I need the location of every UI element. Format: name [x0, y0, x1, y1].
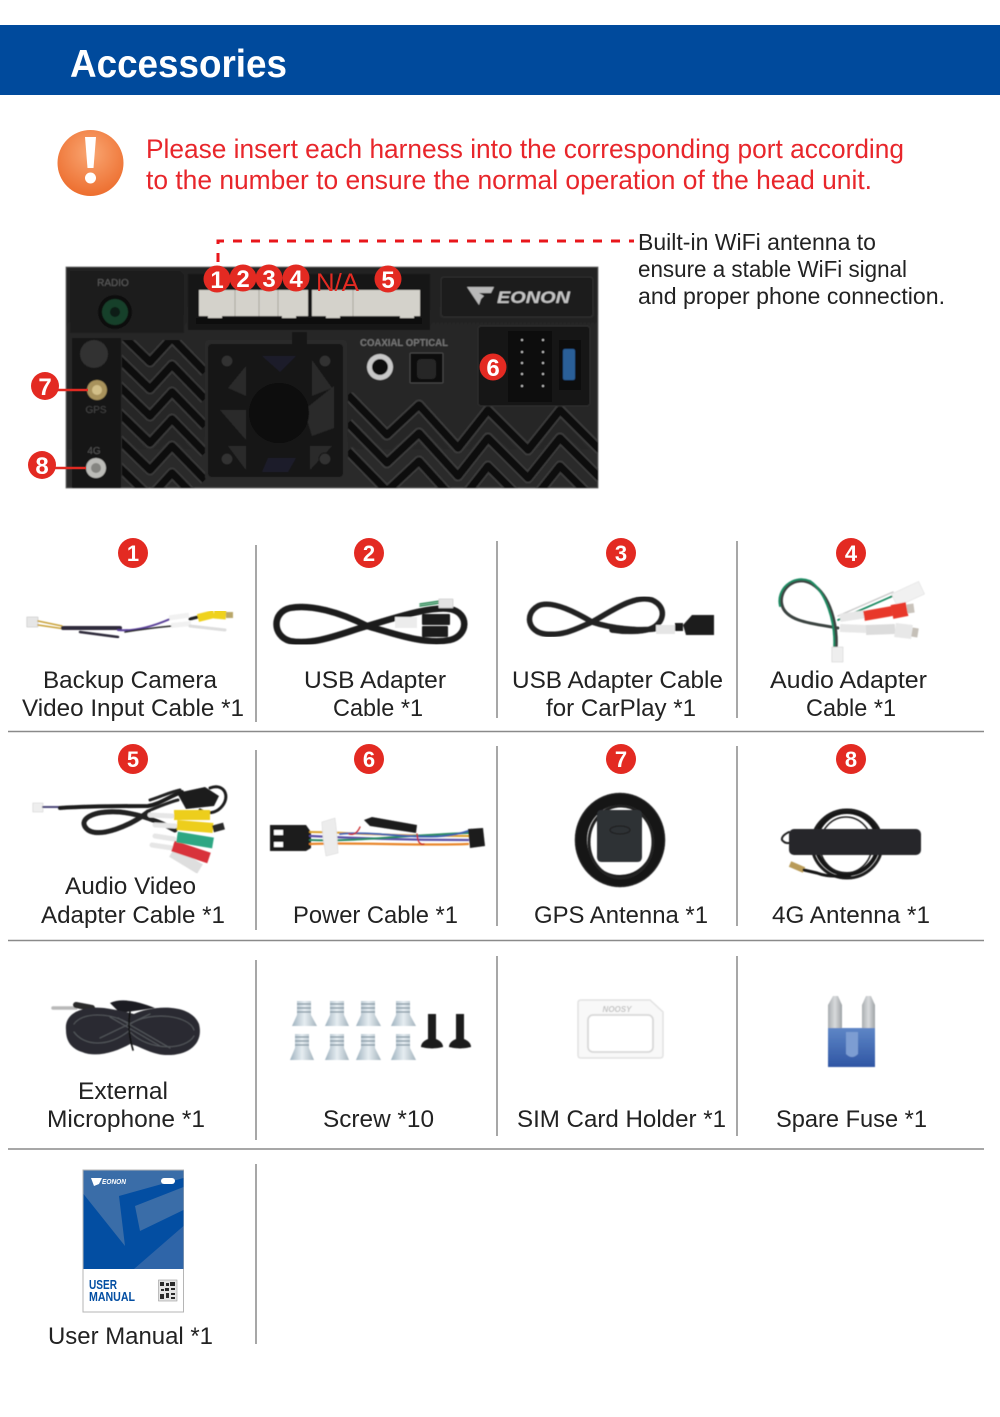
header banner — [0, 25, 1000, 95]
item 2: USB adapter cable: Cable *1 — [333, 695, 423, 722]
warning text — [146, 134, 904, 195]
warning text: to the number to ensure the normal operation of the head unit. — [146, 165, 872, 195]
title: Accessories — [70, 43, 287, 86]
item 4: audio adapter cable — [770, 538, 927, 722]
item: external microphone — [47, 1000, 205, 1133]
cable photo — [33, 787, 226, 869]
item 3: USB adapter cable for CarPlay: USB Adapter Cable — [512, 667, 723, 694]
item: external microphone: Microphone *1 — [47, 1106, 205, 1133]
item 2: USB adapter cable — [276, 538, 464, 722]
item 8: 4G antenna: 4G Antenna *1 — [772, 902, 930, 929]
right vents — [348, 392, 598, 488]
antenna connectors: 4G — [87, 446, 101, 457]
warning text: Please insert each harness into the corresponding port according — [146, 134, 904, 164]
screws photo — [290, 1001, 471, 1060]
item 7: GPS antenna: 7 — [615, 747, 627, 772]
item: spare fuse — [776, 996, 927, 1133]
radio bay — [70, 271, 184, 333]
manual cover: USER — [89, 1278, 117, 1292]
item 6: power cable — [270, 744, 485, 929]
icon: warning exclamation — [58, 130, 124, 196]
item: SIM card holder: SIM Card Holder *1 — [517, 1106, 726, 1133]
item 8: 4G antenna: 8 — [845, 747, 857, 772]
item 3: USB adapter cable for CarPlay: for CarPlay *1 — [546, 695, 696, 722]
antenna photo — [576, 794, 664, 886]
WiFi antenna note — [638, 229, 945, 309]
antenna connectors — [80, 340, 108, 478]
port number markers: N/A — [316, 269, 359, 297]
port number markers: 2 — [236, 266, 250, 293]
item 6: power cable: Power Cable *1 — [293, 902, 458, 929]
item 4: audio adapter cable: 4 — [845, 541, 858, 566]
WiFi antenna note: Built-in WiFi antenna to — [638, 229, 876, 255]
EONON logo plate: EONON — [497, 288, 571, 307]
item 1: backup camera cable: Video Input Cable *1 — [22, 695, 244, 722]
item 6: power cable: 6 — [363, 747, 375, 772]
cable photo — [276, 599, 464, 642]
fan — [205, 332, 347, 480]
port number markers: 8 — [35, 453, 49, 480]
fuse photo — [828, 996, 875, 1067]
panel: head unit rear — [28, 241, 634, 507]
antenna connectors: GPS — [85, 405, 107, 416]
SIM holder photo — [578, 1000, 663, 1058]
item 4: audio adapter cable: Cable *1 — [806, 695, 896, 722]
item: screws — [290, 1001, 471, 1133]
item 3: USB adapter cable for CarPlay — [512, 538, 723, 722]
item 5: audio video adapter cable: Audio Video — [65, 873, 196, 900]
item 1: backup camera cable — [22, 538, 244, 722]
port number markers: 7 — [38, 374, 52, 401]
left vents — [122, 340, 206, 488]
item 5: audio video adapter cable: Adapter Cable *1 — [41, 902, 225, 929]
item: user manual — [48, 1170, 213, 1350]
item: screws: Screw *10 — [323, 1106, 434, 1133]
cable photo — [27, 613, 233, 637]
antenna photo — [782, 810, 921, 878]
port number markers: 5 — [381, 267, 395, 294]
port number markers: 4 — [289, 266, 303, 293]
radio bay: RADIO — [97, 278, 129, 289]
port number markers: 6 — [486, 355, 500, 382]
audio ports: COAXIAL OPTICAL — [360, 338, 448, 349]
manual cover: EONON — [102, 1179, 127, 1186]
SIM holder photo: NOOSY — [603, 1005, 632, 1014]
item 8: 4G antenna — [772, 744, 930, 929]
item: SIM card holder — [517, 1000, 726, 1133]
item 5: audio video adapter cable: 5 — [127, 747, 139, 772]
EONON logo plate — [441, 277, 593, 317]
item 1: backup camera cable: Backup Camera — [43, 667, 218, 694]
item 2: USB adapter cable: USB Adapter — [304, 667, 446, 694]
manual cover: MANUAL — [89, 1290, 135, 1304]
antenna strip — [72, 338, 121, 488]
item 4: audio adapter cable: Audio Adapter — [770, 667, 927, 694]
item 1: backup camera cable: 1 — [127, 541, 139, 566]
item: external microphone: External — [78, 1078, 168, 1105]
dashed WiFi leader — [218, 241, 634, 262]
WiFi antenna note: and proper phone connection. — [638, 283, 945, 309]
manual cover — [83, 1170, 184, 1312]
item 7: GPS antenna: GPS Antenna *1 — [534, 902, 708, 929]
microphone photo — [53, 1000, 200, 1055]
cable photo — [270, 817, 485, 856]
WiFi antenna note: ensure a stable WiFi signal — [638, 256, 907, 282]
audio ports — [360, 338, 448, 383]
item 7: GPS antenna — [534, 744, 708, 929]
port number markers: 3 — [262, 266, 276, 293]
connector bay — [188, 274, 430, 330]
item 2: USB adapter cable: 2 — [363, 541, 375, 566]
cable photo — [779, 579, 925, 662]
cable photo — [530, 599, 714, 635]
item: user manual: User Manual *1 — [48, 1323, 213, 1350]
item 3: USB adapter cable for CarPlay: 3 — [615, 541, 627, 566]
port number markers — [28, 264, 506, 480]
power port and fuse — [478, 326, 590, 406]
item: spare fuse: Spare Fuse *1 — [776, 1106, 927, 1133]
port number markers: 1 — [210, 267, 224, 294]
item 5: audio video adapter cable — [33, 744, 226, 929]
